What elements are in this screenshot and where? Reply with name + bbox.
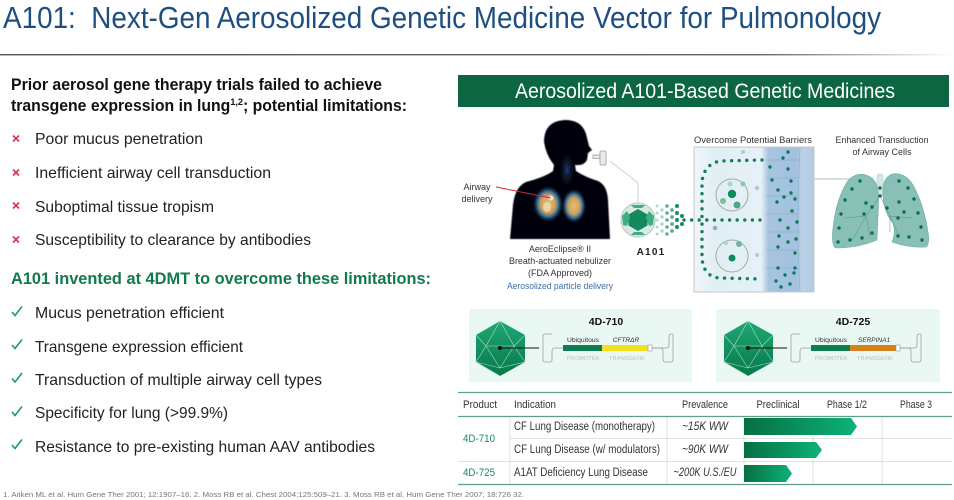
diagram: gene cassette: CFTRΔR [613,337,639,344]
diagram: gene cassette: TRANSGENE [857,356,893,362]
heading: prior trials: transgene expression in lung [11,97,240,115]
diagram: gene cassette [791,334,921,362]
heading: enhanced transduction [836,135,928,157]
list: advantages: Mucus penetration efficient [35,305,225,322]
row group: 4D-710: ~15K WW [682,421,729,433]
caption: nebulizer: AeroEclipse® II [529,244,591,254]
heading: prior trials [11,76,407,115]
row group: 4D-710: ~90K WW [682,444,729,456]
list: advantages: Transduction of multiple airway cell types [35,372,322,389]
icon: A101 particle [621,203,655,237]
connector: nebulizer to A101 [610,161,638,203]
connector: barrier to lungs [814,178,850,180]
mucus particles [716,179,748,272]
label: airway delivery with pointer: Airway [463,182,491,192]
row: 4D-725: 4D-725 [463,467,495,479]
table grid [458,392,952,484]
row: 4D-725: A1AT Deficiency Lung Disease [514,467,648,479]
list: limitations: Poor mucus penetration [35,131,203,148]
diagram: gene cassette: SERPINA1 [858,337,890,344]
panel: 4D-725 construct [716,309,940,382]
list: advantages: Resistance to pre-existing human AAV antibodies [35,439,375,456]
list: advantages: Transgene expression efficient [35,339,244,356]
table header: Prevalence [682,399,728,411]
table header: Phase 3 [900,399,932,411]
table header: Indication [514,399,556,411]
illustration: patient with nebulizer [461,120,613,291]
icon: lung scan silhouette [510,120,610,239]
banner heading [458,75,949,107]
diagram: gene cassette: PROMOTER [814,356,848,362]
icon: aerosol droplet cloud [656,204,684,236]
icon: capsid [476,321,539,376]
table header: Phase 1/2 [827,399,867,411]
row: 4D-725 [463,465,792,482]
diagram: gene cassette: Ubiquitous [567,337,600,344]
heading: enhanced transduction: Enhanced Transduction [836,135,928,145]
heading: prior trials: Prior aerosol gene therapy trials failed to achieve [11,76,382,94]
table header: Preclinical [756,399,800,411]
diagram: gene cassette [543,334,673,362]
title: A101: Next-Gen Aerosolized Genetic Medicine Vector for Pulmonology [3,0,881,35]
heading: enhanced transduction: of Airway Cells [852,147,912,157]
icon: lungs with transduced cells [832,174,929,248]
label: 4D-710: 4D-710 [589,316,623,328]
list: limitations: Susceptibility to clearance by antibodies [35,232,311,249]
label: airway delivery with pointer [461,182,551,204]
panel: 4D-710 construct [469,309,692,382]
heading: prior trials: ; potential limitations: [243,97,407,115]
diagram: gene cassette: TRANSGENE [609,356,645,362]
table header [463,399,932,411]
label: 4D-725: 4D-725 [836,316,870,328]
caption: nebulizer: (FDA Approved) [528,268,592,278]
row group: 4D-710: 4D-710 [463,433,495,445]
diagram: airway barrier cross-section [684,147,814,292]
row group: 4D-710 [463,418,857,458]
list: limitations [13,131,311,249]
dotted particle paths [684,160,763,279]
label: A101: A101 [637,247,665,258]
row group: 4D-710: CF Lung Disease (w/ modulators) [514,444,660,456]
diagram: gene cassette: PROMOTER [566,356,600,362]
icon: nebulizer [593,151,606,165]
banner heading: Aerosolized A101-Based Genetic Medicines [515,80,895,103]
panel: limitations of prior trials [11,76,407,249]
list: advantages [12,305,375,456]
panel: A101 advantages [11,270,431,456]
label: airway delivery with pointer: delivery [461,194,493,204]
transduced cell dots [768,150,799,289]
list: advantages: Specificity for lung (>99.9%) [35,405,228,422]
caption: nebulizer [507,244,613,291]
row: 4D-725: ~200K U.S./EU [674,467,737,479]
footnote references: 1. Aitken ML et al. Hum Gene Ther 2001; 12:1907–16. 2. Moss RB et al. Chest 2004;125:509–21. 3. Moss RB et al. Hum Gene Ther 2007; 18:726 32. [3,490,524,499]
row group: 4D-710: CF Lung Disease (monotherapy) [514,421,655,433]
heading: A101 invented at 4DMT: A101 invented at 4DMT to overcome these limitations: [11,270,431,288]
icon: capsid [724,321,787,376]
heading: prior trials: 1,2 [230,97,243,108]
caption: nebulizer: Breath-actuated nebulizer [509,256,611,266]
caption: nebulizer: Aerosolized particle delivery [507,281,613,291]
list: limitations: Inefficient airway cell transduction [35,165,271,182]
table header: Product [463,399,497,411]
pipeline table [458,392,952,484]
list: limitations: Suboptimal tissue tropism [35,199,214,216]
heading: overcome potential barriers: Overcome Potential Barriers [694,135,813,145]
diagram: gene cassette: Ubiquitous [815,337,848,344]
